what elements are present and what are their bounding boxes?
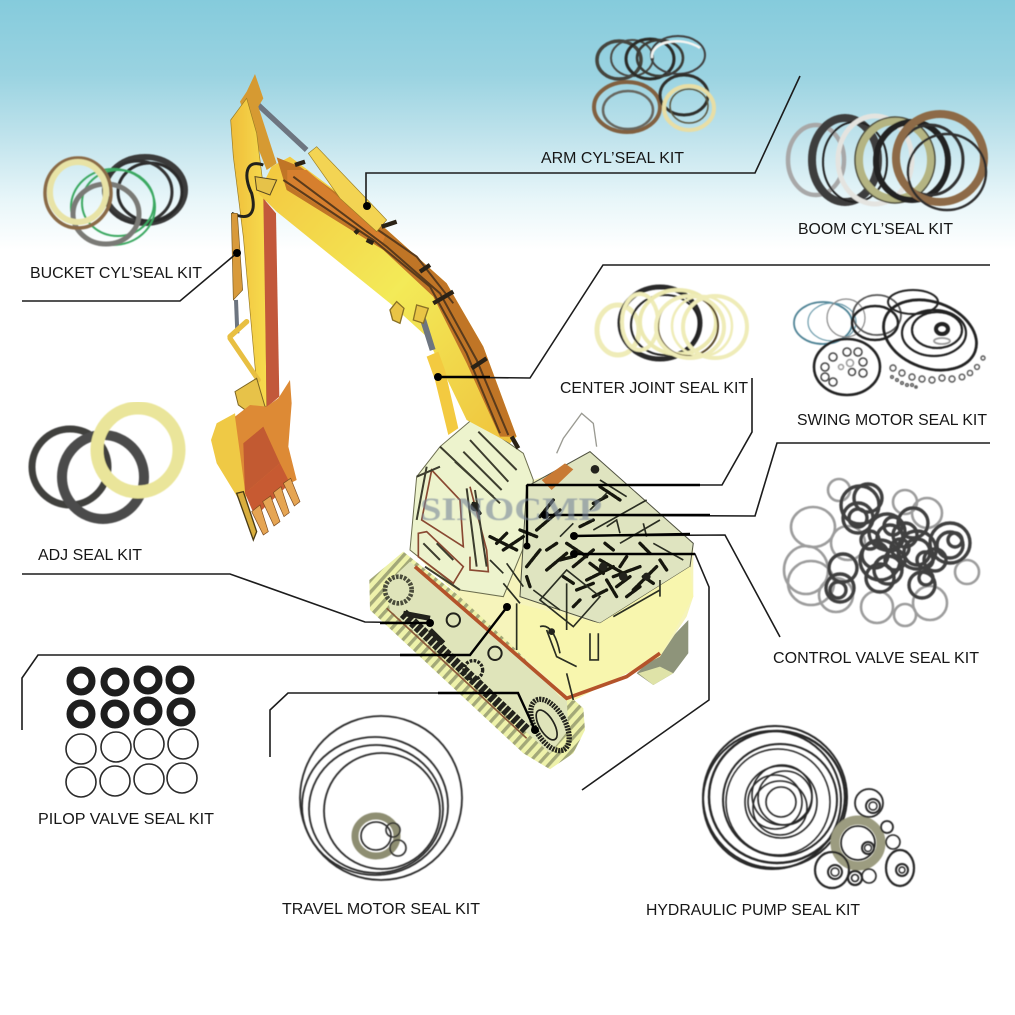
bucket cutting edge — [245, 463, 290, 517]
kit: pilot valve seals — [66, 669, 198, 797]
engine bay — [520, 452, 693, 623]
main crawler track — [369, 552, 585, 769]
counterweight panel — [517, 567, 693, 701]
orange body stripe — [415, 567, 660, 698]
swing motor leader line — [545, 443, 990, 516]
boom cylinder lugs — [390, 302, 428, 323]
bucket side plate — [237, 492, 257, 540]
kit: hydraulic pump seals — [703, 726, 914, 888]
label: arm kit: ARM CYL’SEAL KIT — [541, 150, 684, 167]
arm cylinder rod — [258, 105, 307, 150]
kit: arm cylinder seals — [594, 36, 714, 132]
bucket cylinder — [231, 213, 243, 300]
bucket red face — [243, 427, 280, 493]
label: travel motor kit: TRAVEL MOTOR SEAL KIT — [282, 901, 480, 918]
background sky gradient — [0, 0, 1015, 250]
track rollers and chain — [385, 577, 577, 757]
kit: travel motor seals — [300, 716, 462, 880]
boom brown top band — [277, 157, 517, 437]
bucket leader line — [22, 253, 237, 301]
orange hinge bracket — [542, 463, 573, 490]
bucket yellow side — [211, 413, 247, 510]
excavator machine body — [369, 413, 693, 769]
leader line dots — [233, 202, 578, 734]
label: adj kit: ADJ SEAL KIT — [38, 547, 142, 564]
engine hardware dense detail — [473, 487, 667, 607]
cab interior leader line — [527, 378, 752, 546]
bucket teeth — [252, 478, 300, 535]
center joint leader line — [438, 265, 990, 378]
label: bucket kit: BUCKET CYL’SEAL KIT — [30, 265, 202, 282]
bucket pivot plate — [235, 378, 265, 422]
watermark: SINOCMP — [420, 492, 602, 528]
bucket linkage bars — [230, 322, 258, 380]
label: pilot valve kit: PILOP VALVE SEAL KIT — [38, 811, 214, 828]
label: hydraulic pump kit: HYDRAULIC PUMP SEAL KIT — [646, 902, 860, 919]
leader lines — [22, 76, 990, 790]
kit: control valve seals — [784, 479, 979, 626]
kit: adj seals — [32, 408, 179, 519]
adj leader line — [22, 574, 430, 623]
arm pivot fitting — [255, 177, 277, 195]
boom hose lines — [283, 177, 508, 435]
arm red-brown web — [263, 198, 279, 407]
arm leader line — [366, 76, 800, 206]
cab — [410, 418, 533, 597]
label: swing motor kit: SWING MOTOR SEAL KIT — [797, 412, 987, 429]
arm hose — [232, 164, 263, 217]
boom brown plate — [287, 170, 385, 245]
bucket orange body — [235, 380, 297, 503]
rear crawler track — [637, 620, 688, 685]
travel motor leader line — [270, 693, 535, 757]
upper structure — [410, 418, 693, 701]
label: control valve kit: CONTROL VALVE SEAL KIT — [773, 650, 979, 667]
label: boom kit: BOOM CYL’SEAL KIT — [798, 221, 953, 238]
rear handrail — [557, 413, 597, 453]
boom cylinder body — [427, 352, 458, 435]
hydraulic pump leader line — [574, 554, 709, 790]
cab roof ribs — [417, 432, 517, 590]
arm upper bracket — [240, 74, 277, 170]
boom cylinder rod — [423, 318, 433, 350]
bucket cylinder rod — [236, 300, 237, 333]
arm cylinder — [308, 147, 387, 232]
cab window frames — [418, 470, 488, 583]
heavier line segments over machine — [380, 377, 710, 730]
label: center joint kit: CENTER JOINT SEAL KIT — [560, 380, 748, 397]
kit: center joint seals — [597, 287, 747, 359]
boom dark clamps — [295, 162, 518, 448]
kit: bucket cylinder seals — [45, 157, 185, 245]
pilot valve leader line — [22, 607, 507, 730]
excavator arm, boom and bucket — [211, 74, 518, 540]
kit: boom cylinder seals — [788, 114, 986, 210]
kit: swing motor seals — [794, 288, 986, 395]
arm yellow member — [231, 98, 267, 407]
control valve leader line — [573, 535, 780, 637]
boom main yellow — [258, 157, 517, 443]
track inner frame — [385, 562, 568, 753]
